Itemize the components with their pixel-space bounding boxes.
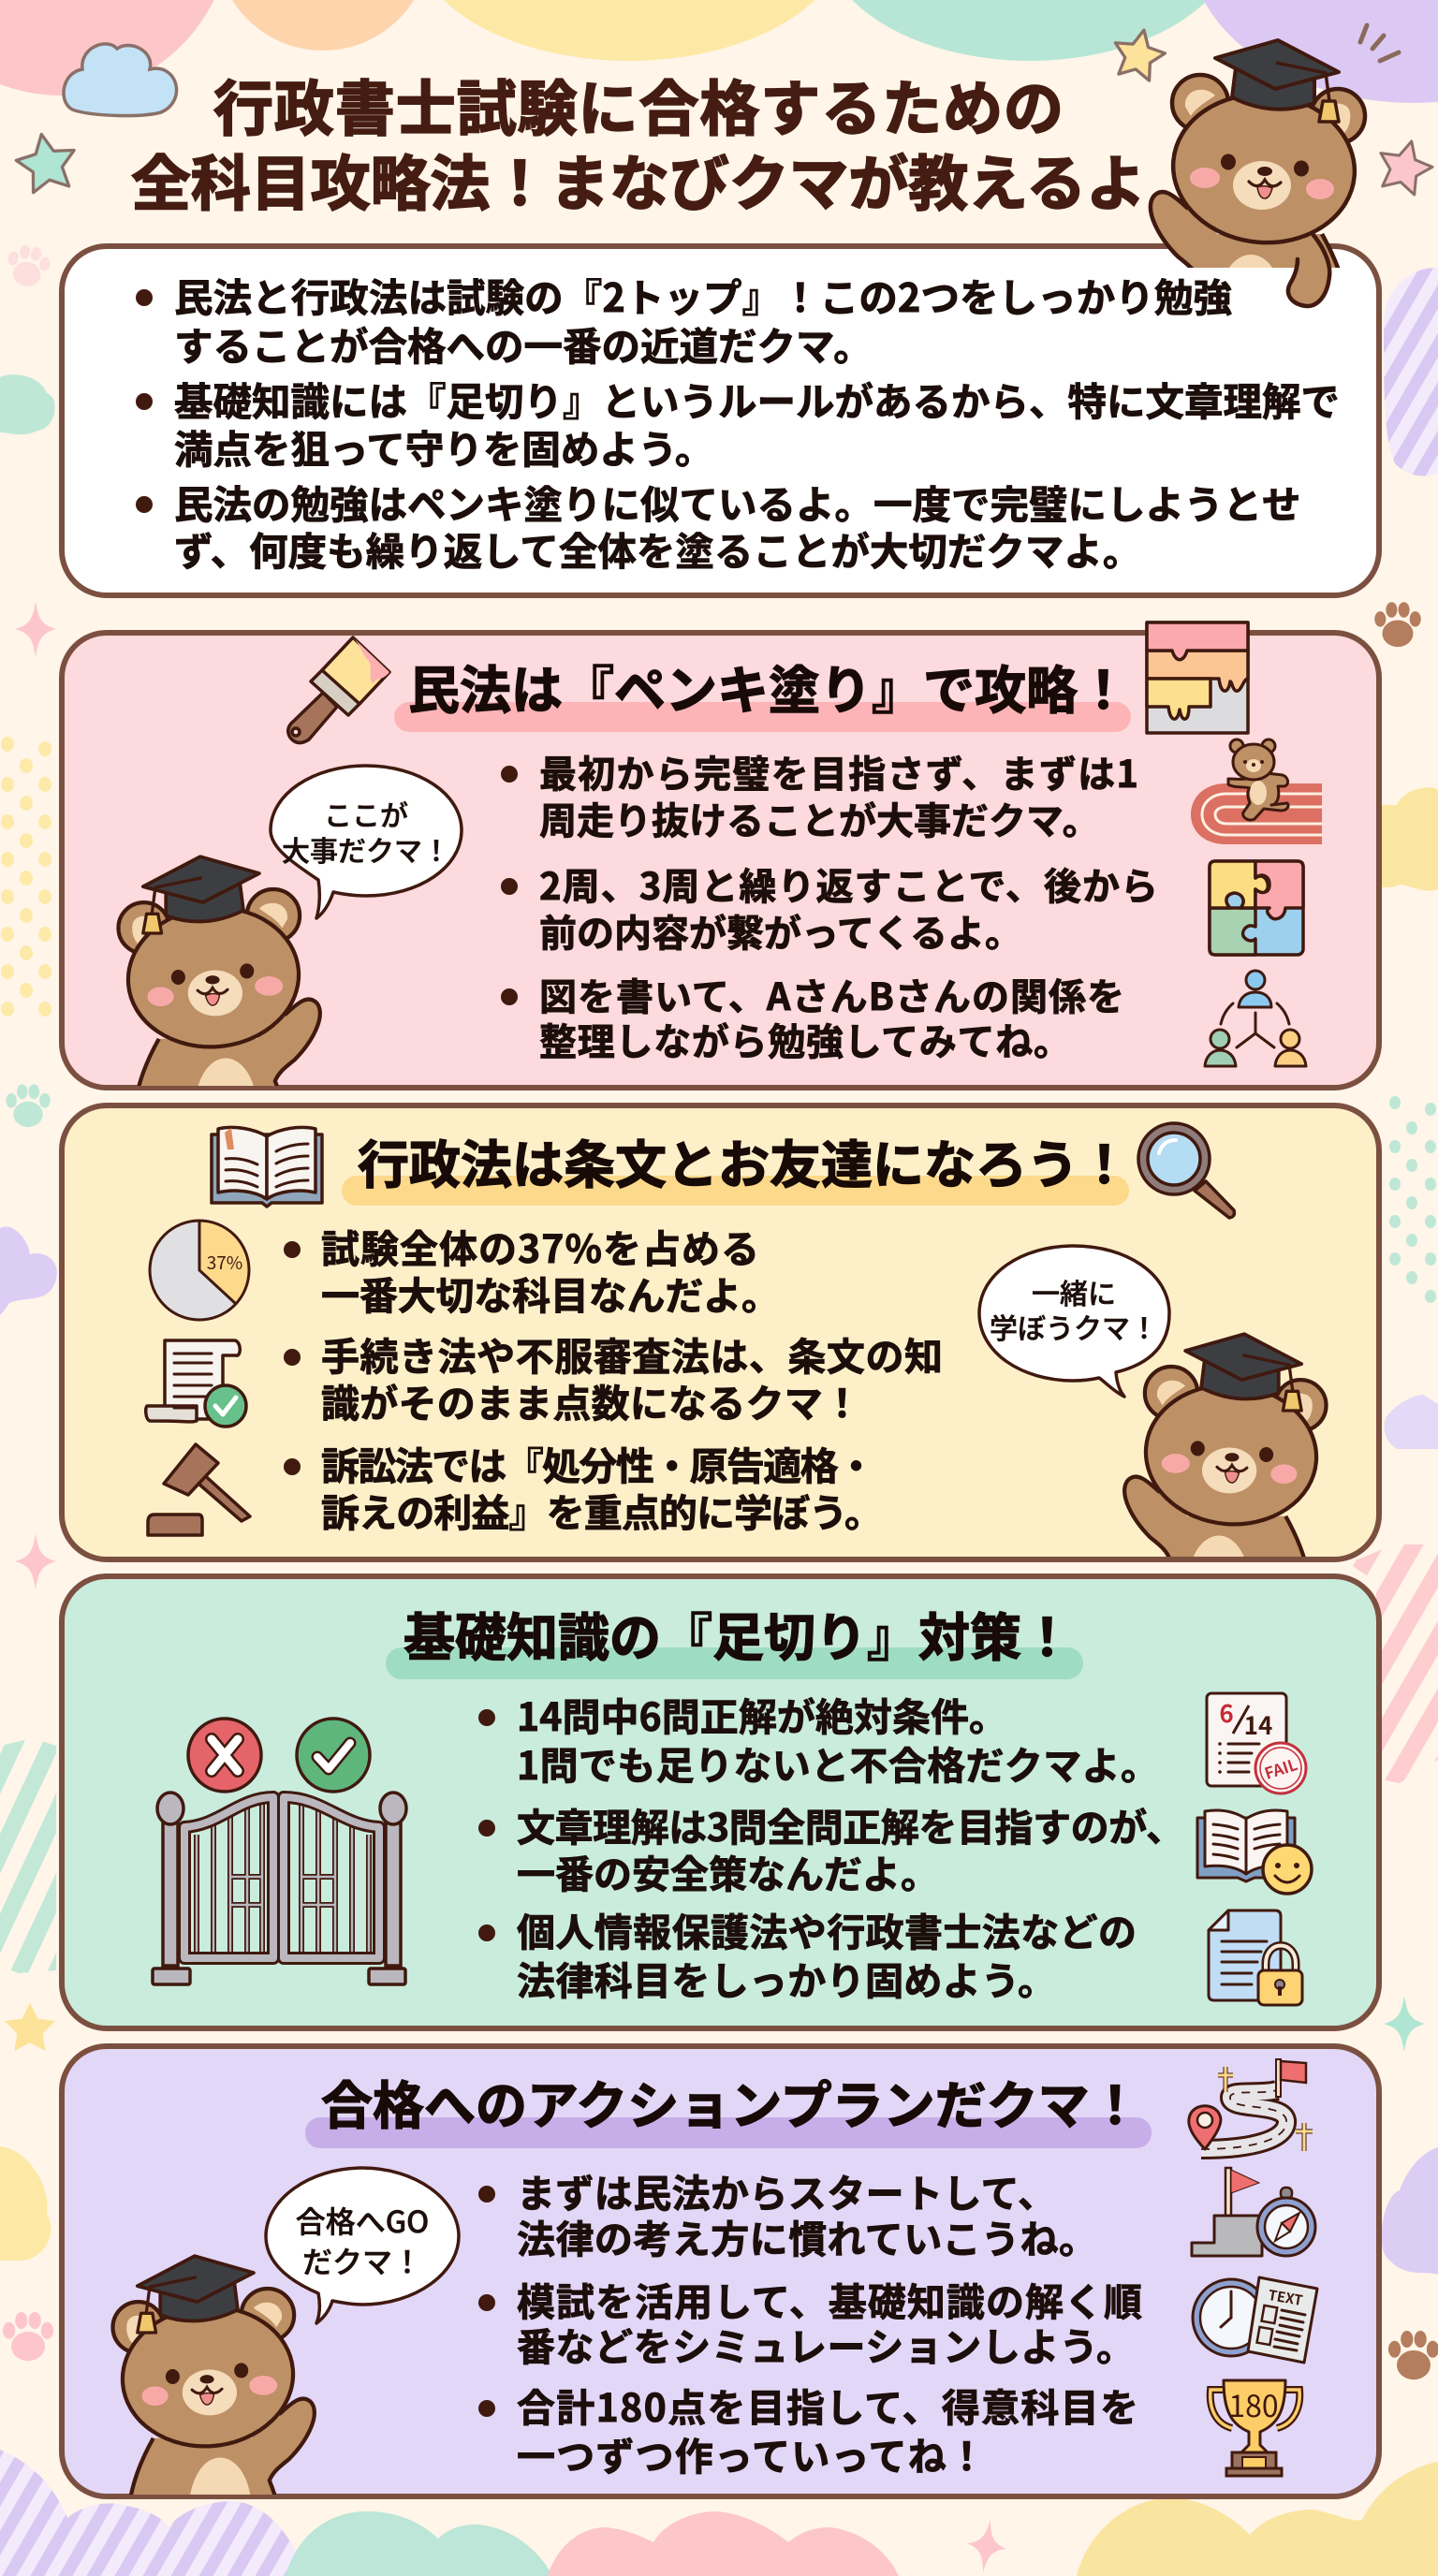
icon: pink sparkle: [963, 2517, 1010, 2575]
panel: foundation knowledge: [62, 1576, 1379, 2028]
mint cloud left: [0, 374, 55, 434]
mascot: administrative law bear: [1124, 1334, 1327, 1587]
icon: red cross: [188, 1719, 261, 1792]
bullet list: civil law: [501, 744, 1158, 1066]
icon: faint pink paw: [4, 242, 52, 290]
bottom yellow cloud: [1077, 2462, 1438, 2576]
speech bubble: action plan: だクマ！: [302, 2239, 422, 2282]
icon: puzzle: [1210, 861, 1303, 955]
bullet list: administrative law: 識がそのまま点数になるクマ！: [321, 1372, 861, 1428]
bullet list: civil law: 2周、3周と繰り返すことで、後から: [539, 856, 1158, 911]
bullet list: civil law: 最初から完璧を目指さず、まずは1: [539, 744, 1138, 798]
icon: mint paw: [6, 1084, 51, 1127]
icon: running track with bear: [1191, 739, 1322, 844]
icon: clock and test sheet: TEXT: [1267, 2285, 1304, 2310]
sparkle lines: [1360, 25, 1399, 61]
lavender cloud left: [0, 1227, 57, 1315]
bullet list: action plan: [478, 2162, 1142, 2481]
icon: clock and test sheet: [1193, 2277, 1317, 2363]
mascot: action plan bear: [112, 2256, 315, 2509]
icon: brown paw: [1388, 2331, 1438, 2379]
mint stripes left: [0, 1738, 56, 1973]
bottom mint cloud: [286, 2511, 552, 2576]
panel: civil law: [62, 622, 1379, 1109]
lavender paw right: [1384, 1395, 1438, 1449]
speech bubble: civil law: ここが: [324, 793, 408, 834]
bullet list: summary: [136, 267, 1340, 577]
bullet list: summary: ず、何度も繰り返して全体を塗ることが大切だクマよ。: [174, 520, 1141, 577]
icon: 6/14 fail sheet: FAIL: [1261, 1751, 1300, 1784]
bullet list: foundation knowledge: 一番の安全策なんだよ。: [517, 1843, 939, 1899]
bullet list: administrative law: 訴えの利益』を重点的に学ぼう。: [321, 1482, 883, 1538]
icon: exam gate: [153, 1793, 406, 1984]
bullet list: civil law: 周走り抜けることが大事だクマ。: [539, 791, 1100, 845]
icon: yellow star: [1109, 24, 1168, 82]
pink stripes right: [1348, 1544, 1438, 1783]
yellow dots left: [1, 737, 51, 1017]
bullet list: summary: 民法と行政法は試験の『2トップ』！この2つをしっかり勉強: [174, 267, 1232, 323]
icon: magnifying glass: [1138, 1123, 1234, 1218]
icon: mint star: [12, 129, 81, 195]
bullet list: administrative law: 訴訟法では『処分性・原告適格・: [321, 1435, 875, 1491]
title: [131, 62, 1146, 223]
heading highlight: [394, 702, 1131, 732]
icon: blue cloud: [64, 44, 177, 116]
bullet list: summary: 基礎知識には『足切り』というルールがあるから、特に文章理解で: [174, 371, 1340, 427]
speech bubble: action plan: 合格へGO: [296, 2199, 429, 2242]
title: 全科目攻略法！まなびクマが教えるよ: [131, 137, 1146, 223]
chart: 37 percent pie: [150, 1221, 249, 1320]
bullet list: foundation knowledge: 1問でも足りないと不合格だクマよ。: [517, 1734, 1159, 1791]
icon: yellow star: [5, 2003, 55, 2051]
icon: 6/14 fail sheet: [1207, 1693, 1306, 1793]
icon: brown paw: [1374, 602, 1421, 647]
icon: book with smile: [1197, 1810, 1312, 1894]
bottom pink cloud: [548, 2511, 899, 2576]
bullet list: foundation knowledge: 法律科目をしっかり固めよう。: [517, 1950, 1056, 2006]
bullet list: administrative law: 手続き法や不服審査法は、条文の知: [321, 1325, 943, 1382]
bullet list: foundation knowledge: 文章理解は3問全問正解を目指すのが、: [517, 1796, 1184, 1852]
bullet list: civil law: 図を書いて、AさんBさんの関係を: [539, 967, 1124, 1021]
icon: pink star: [1372, 135, 1437, 198]
yellow cloud right: [1376, 787, 1438, 890]
lavender striped cloud: [1384, 268, 1438, 476]
bullet list: action plan: 法律の考え方に慣れていこうね。: [517, 2208, 1097, 2264]
heading: 行政法は条文とお友達になろう！: [358, 1123, 1130, 1198]
bullet list: administrative law: 一番大切な科目なんだよ。: [321, 1265, 780, 1321]
speech bubble: administrative law: 学ぼうクマ！: [990, 1306, 1158, 1347]
bullet list: civil law: 前の内容が繋がってくるよ。: [539, 903, 1022, 958]
panel: administrative law: [62, 1105, 1379, 1587]
speech bubble: civil law: [271, 766, 462, 918]
heading highlight: [342, 1176, 1129, 1206]
mascot: title bear: [1151, 40, 1365, 309]
panel: action plan: [62, 2046, 1379, 2509]
top pastel scallops: [0, 0, 1438, 103]
bottom lavender stripes cloud: [0, 2450, 304, 2576]
bullet list: action plan: 一つずつ作っていってね！: [517, 2425, 986, 2481]
bullet list: action plan: 模試を活用して、基礎知識の解く順: [517, 2271, 1142, 2327]
heading: 民法は『ペンキ塗り』で攻略！: [408, 649, 1129, 724]
chart: 37 percent pie: 37%: [207, 1250, 242, 1275]
bullet list: civil law: 整理しながら勉強してみてね。: [539, 1012, 1071, 1066]
title: 行政書士試験に合格するための: [213, 62, 1064, 148]
icon: green check: [297, 1719, 370, 1792]
heading: 基礎知識の『足切り』対策！: [404, 1596, 1073, 1671]
yellow cloud left: [0, 2146, 51, 2261]
bullet list: administrative law: [284, 1218, 943, 1538]
bullet list: summary: 民法の勉強はペンキ塗りに似ているよ。一度で完璧にしようとせ: [174, 474, 1301, 530]
bullet list: summary: 満点を狙って守りを固めよう。: [174, 418, 713, 475]
mint dots right: [1389, 1096, 1436, 1303]
bullet list: foundation knowledge: 個人情報保護法や行政書士法などの: [517, 1901, 1137, 1957]
mascot: civil law bear: [118, 856, 320, 1109]
icon: pink sparkle: [15, 601, 56, 657]
icon: trophy 180: [1211, 2380, 1299, 2476]
icon: pink sparkle: [15, 1533, 56, 1589]
bullet list: foundation knowledge: 14問中6問正解が絶対条件。: [517, 1686, 1007, 1742]
icon: flag and compass: [1192, 2168, 1315, 2256]
heading: 合格へのアクションプランだクマ！: [321, 2064, 1141, 2139]
icon: 6/14 fail sheet: 14: [1244, 1707, 1272, 1742]
heading highlight: [386, 1647, 1083, 1679]
icon: open book: [212, 1127, 322, 1207]
speech bubble: administrative law: 一緒に: [1032, 1271, 1116, 1312]
panel: summary: [62, 246, 1379, 595]
icon: mint sparkle: [1384, 1996, 1425, 2052]
icon: locked document: [1209, 1910, 1302, 2005]
icon: trophy 180: 180: [1228, 2383, 1279, 2426]
heading highlight: [305, 2117, 1152, 2148]
bullet list: action plan: 番などをシミュレーションしよう。: [517, 2316, 1135, 2372]
bullet list: action plan: 合計180点を目指して、得意科目を: [517, 2377, 1138, 2433]
speech bubble: action plan: [266, 2168, 459, 2323]
speech bubble: administrative law: [979, 1246, 1169, 1397]
lavender cloud right: [1382, 2147, 1438, 2275]
icon: gavel: [148, 1444, 250, 1535]
bullet list: administrative law: 試験全体の37%を占める: [321, 1218, 759, 1274]
speech bubble: civil law: 大事だクマ！: [282, 828, 450, 870]
icon: scroll with check: [146, 1340, 246, 1427]
icon: paintbrush: [288, 637, 389, 743]
bullet list: summary: することが合格への一番の近道だクマ。: [174, 315, 873, 372]
icon: people network: [1205, 971, 1306, 1066]
icon: road map: [1189, 2059, 1313, 2151]
icon: pink paw: [3, 2312, 53, 2361]
icon: 6/14 fail sheet: 6: [1219, 1695, 1234, 1730]
bullet list: foundation knowledge: [478, 1686, 1184, 2006]
icon: paint layers: [1147, 622, 1248, 733]
bullet list: action plan: まずは民法からスタートして、: [517, 2162, 1056, 2218]
